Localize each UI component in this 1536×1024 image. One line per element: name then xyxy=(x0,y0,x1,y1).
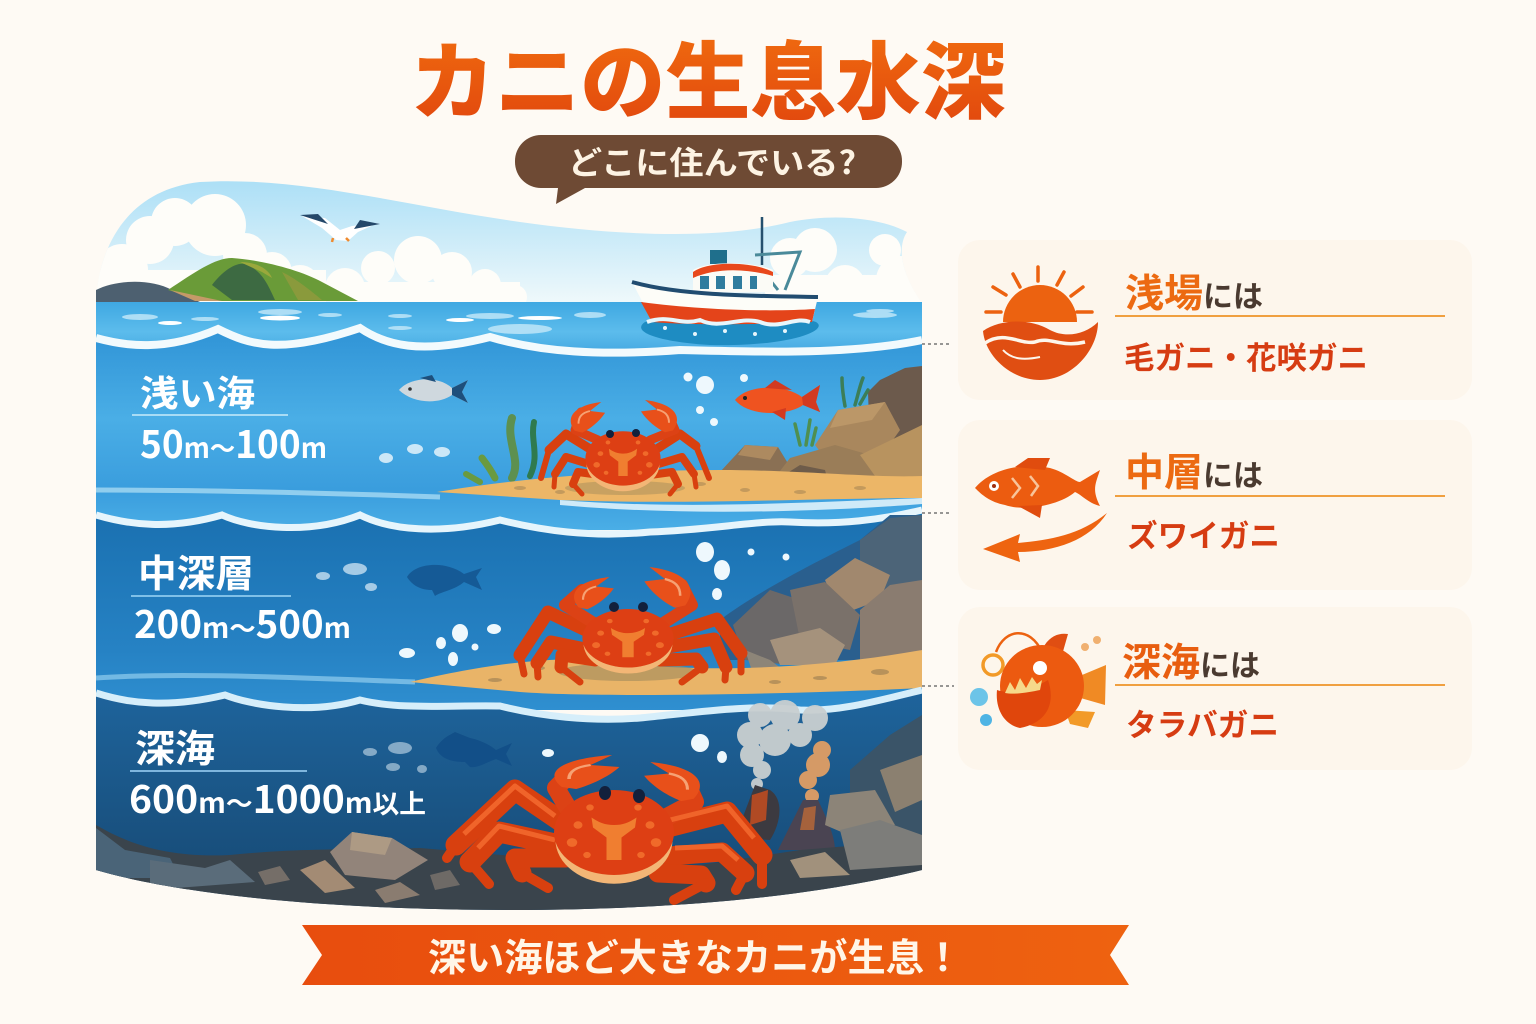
white bubbles xyxy=(316,372,790,773)
mid rocks xyxy=(720,515,922,680)
crab: deep xyxy=(447,755,762,900)
shallow rocks xyxy=(722,366,922,476)
silver fish xyxy=(399,375,468,403)
bottom banner xyxy=(302,925,1129,985)
heading: shallow: 浅場には xyxy=(1125,263,1263,319)
deep right rock wall xyxy=(850,715,922,835)
speech bubble subtitle xyxy=(515,135,902,204)
panel: shallow xyxy=(958,240,1472,400)
layer label: middle: 200m～500m xyxy=(134,594,351,649)
boat xyxy=(632,217,819,345)
heading: middle: 中層には xyxy=(1125,442,1263,498)
layer label: deep: 深海 xyxy=(135,718,215,773)
crab names: shallow: 毛ガニ・花咲ガニ xyxy=(1124,333,1368,378)
icon: sun over waves xyxy=(983,267,1098,380)
crab: middle xyxy=(520,567,741,682)
seaweed xyxy=(466,378,868,482)
crab names: deep: タラバガニ xyxy=(1126,700,1279,745)
deep sea layer xyxy=(96,690,922,920)
icon: fish with arrow xyxy=(975,458,1107,562)
speech bubble subtitle: どこに住んでいる? xyxy=(568,138,856,184)
island xyxy=(96,258,358,302)
layer label: shallow: 浅い海 xyxy=(140,365,255,417)
panel: middle xyxy=(958,420,1472,590)
surface water xyxy=(96,302,922,349)
panel: deep xyxy=(958,607,1472,770)
dark fish deep xyxy=(436,732,512,767)
layer label: shallow: 50m～100m xyxy=(140,414,327,469)
hydrothermal vents xyxy=(735,700,835,850)
title: カニの生息水深 xyxy=(410,16,1006,137)
icon: anglerfish xyxy=(970,633,1106,728)
mid sandbank xyxy=(410,650,922,695)
seagull xyxy=(300,214,380,242)
layer label: middle: 中深層 xyxy=(138,543,254,598)
layer label: deep: 600m～1000m以上 xyxy=(129,769,426,824)
bottom banner: 深い海ほど大きなカニが生息！ xyxy=(428,927,962,982)
shallow sea layer xyxy=(96,328,922,530)
crab names: middle: ズワイガニ xyxy=(1127,511,1280,556)
layer label: deep xyxy=(129,718,426,824)
layer label: shallow xyxy=(132,365,327,469)
crab: shallow xyxy=(541,400,709,494)
shallow sandbank xyxy=(437,470,922,512)
mid sea layer xyxy=(96,510,922,710)
layer label: middle xyxy=(131,543,351,649)
sky xyxy=(102,181,907,302)
dark fish middle xyxy=(407,565,482,596)
ocean cross-section scene xyxy=(90,175,930,920)
seabed xyxy=(96,755,922,920)
heading: deep: 深海には xyxy=(1122,632,1260,688)
red fish xyxy=(735,380,820,420)
